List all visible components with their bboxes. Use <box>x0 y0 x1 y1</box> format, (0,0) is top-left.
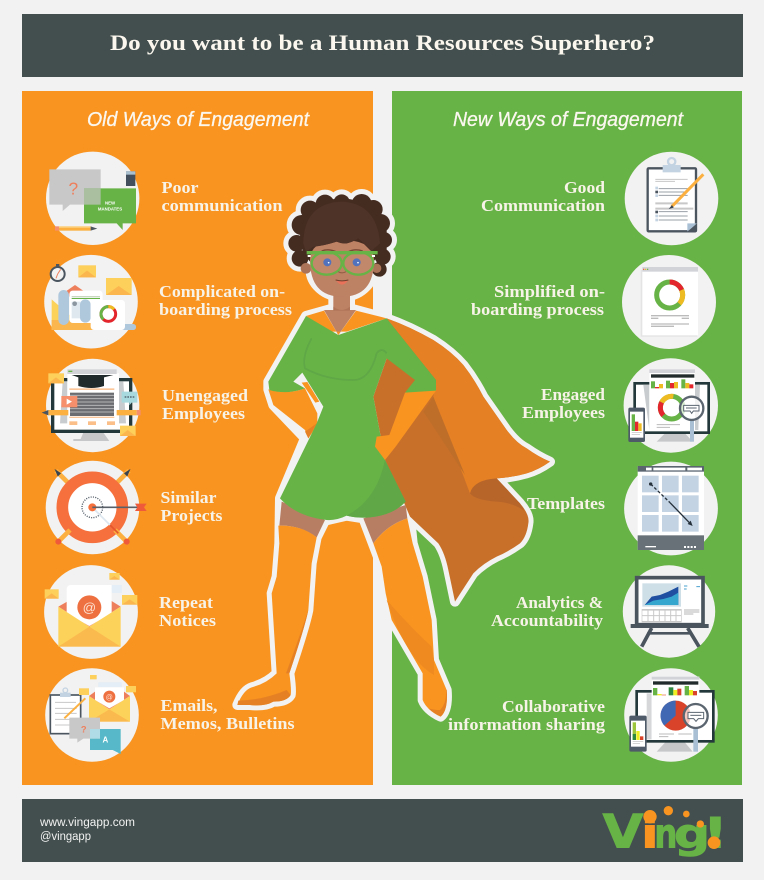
mouth <box>336 280 348 285</box>
green dress <box>268 316 436 520</box>
label: complicated on-boarding process <box>159 282 292 319</box>
brows <box>322 250 363 252</box>
title banner <box>22 14 743 77</box>
logo: Ving!: n <box>654 811 677 857</box>
label: complicated on-boarding process: Complicated on- <box>159 282 285 301</box>
left forearm <box>268 388 317 438</box>
icon: documents and envelope, complicated on-boarding <box>44 255 138 348</box>
cape <box>373 318 550 602</box>
icon: clipboard and bubbles, emails memos bulletins: ? <box>81 724 87 734</box>
footer website and handle: www.vingapp.com <box>39 817 135 829</box>
face <box>310 240 374 297</box>
right glove arm <box>375 391 436 460</box>
icon: clipboard and bubbles, emails memos bulletins: @ <box>106 694 113 701</box>
label: emails, memos, bulletins: Emails, <box>160 696 218 715</box>
icon: clipboard and bubbles, emails memos bulletins: A <box>102 736 108 745</box>
footer website and handle <box>39 817 135 843</box>
icon: document with donut chart, simplified on-boarding <box>622 255 716 349</box>
footer website and handle: @vingapp <box>40 831 91 843</box>
label: templates: Templates <box>527 494 605 513</box>
label: similar projects: Projects <box>160 506 223 525</box>
logo: Ving!: g <box>674 811 710 857</box>
head and hair <box>288 194 392 297</box>
label: poor communication: Poor <box>162 178 199 197</box>
logo: Ving! <box>603 805 728 859</box>
label: good communication <box>481 178 606 215</box>
label: poor communication: communication <box>162 196 283 215</box>
label: emails, memos, bulletins <box>160 696 295 733</box>
logo: Ving!: ! <box>703 808 728 857</box>
label: repeat notices: Notices <box>159 611 216 630</box>
orange sliver between arm and dress <box>302 382 319 403</box>
label: unengaged employees <box>162 386 249 423</box>
icon: presentation board with chart, analytics <box>623 565 715 658</box>
glasses <box>307 252 378 275</box>
label: collaborative information sharing: information sharing <box>448 715 606 734</box>
skin: neck and thighs <box>279 292 407 543</box>
superhero figure <box>237 194 550 717</box>
heading: new ways: New Ways of Engagement <box>453 109 684 131</box>
heading: old ways: Old Ways of Engagement <box>87 109 310 131</box>
title: Do you want to be a Human Resources Superhero? <box>110 30 655 55</box>
icon: envelope with at sign, repeat notices: @ <box>83 600 96 615</box>
left boot <box>237 526 317 705</box>
label: engaged employees <box>522 385 606 422</box>
icon: template grid page, templates <box>624 462 718 555</box>
label: analytics and accountability: Accountability <box>491 611 604 630</box>
label: similar projects <box>160 488 223 525</box>
right boot <box>373 518 447 717</box>
label: similar projects: Similar <box>160 488 217 507</box>
label: poor communication <box>162 178 283 215</box>
cape collar <box>306 311 387 335</box>
label: repeat notices <box>159 593 216 630</box>
eyes <box>323 258 331 266</box>
label: engaged employees: Engaged <box>541 385 606 404</box>
icon: monitor and course page, unengaged employees <box>42 359 141 452</box>
icon: speech bubbles, poor communication <box>46 152 139 245</box>
label: repeat notices: Repeat <box>159 593 213 612</box>
icon: clipboard and bubbles, emails memos bulletins <box>45 668 139 762</box>
label: complicated on-boarding process: boarding process <box>159 300 292 319</box>
icon: monitor and dashboard, engaged employees <box>624 358 718 453</box>
label: unengaged employees: Employees <box>162 404 245 423</box>
nose <box>338 272 346 273</box>
label: analytics and accountability: Analytics & <box>516 593 603 612</box>
label: good communication: Communication <box>481 196 606 215</box>
label: collaborative information sharing <box>448 697 606 734</box>
icon: envelope with at sign, repeat notices <box>44 565 138 659</box>
icon: clipboard with pencil, good communication <box>625 152 718 245</box>
label: analytics and accountability <box>491 593 604 630</box>
footer bar <box>22 799 743 862</box>
icon: speech bubbles, poor communication: ? <box>69 178 78 198</box>
label: good communication: Good <box>564 178 606 197</box>
label: simplified on-boarding process: Simplified on- <box>494 282 605 301</box>
label: simplified on-boarding process: boarding process <box>471 300 604 319</box>
logo: Ving!: V <box>603 805 643 859</box>
label: simplified on-boarding process <box>471 282 605 319</box>
icon: monitor with pie chart, collaborative information sharing <box>624 668 718 762</box>
icon: speech bubbles, poor communication: NEW <box>105 200 116 205</box>
icon: speech bubbles, poor communication: MANDATES <box>98 207 122 212</box>
fringe <box>304 217 387 260</box>
logo: Ving!: i <box>641 811 658 857</box>
ears <box>301 263 311 274</box>
icon: target with arrow, similar projects <box>46 461 147 554</box>
figure outline <box>237 194 550 717</box>
label: unengaged employees: Unengaged <box>162 386 249 405</box>
label: collaborative information sharing: Collaborative <box>502 697 605 716</box>
label: emails, memos, bulletins: Memos, Bulletins <box>160 714 295 733</box>
label: engaged employees: Employees <box>522 403 605 422</box>
